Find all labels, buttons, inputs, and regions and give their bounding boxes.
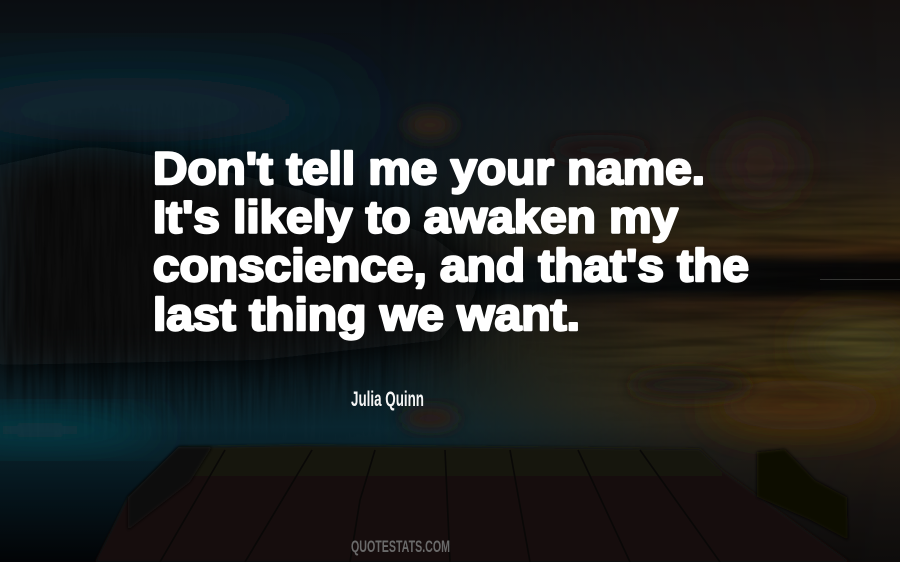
teal sky glow [0, 75, 360, 145]
horizon light line [820, 279, 900, 280]
quote text: Don't tell me your name. [153, 143, 705, 194]
dock planks [160, 450, 720, 562]
pink clouds [406, 112, 454, 138]
teal water glow [0, 416, 160, 444]
dark tree line [0, 145, 490, 365]
quote text [153, 143, 749, 340]
horizontal water streaks [589, 190, 900, 403]
author: Julia Quinn [351, 388, 424, 411]
quote text: conscience, and that's the [153, 240, 749, 291]
vertical reflection streaks [4, 174, 426, 416]
quote text: It's likely to awaken my [153, 192, 678, 242]
warm sky and water, right [445, 0, 900, 562]
dock post [757, 449, 848, 540]
dock [95, 445, 850, 562]
quote text: last thing we want. [153, 289, 580, 340]
orange reflection accents [710, 380, 890, 430]
watermark: QUOTESTATS.COM [351, 537, 450, 556]
